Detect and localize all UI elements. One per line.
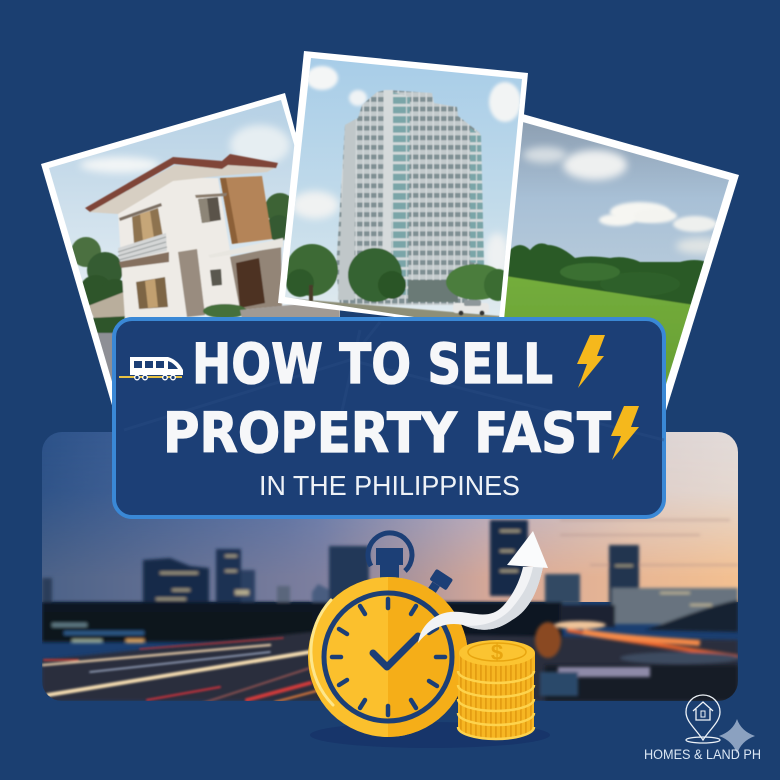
photo: high-rise tower xyxy=(278,50,530,335)
coin stack xyxy=(458,640,535,740)
road xyxy=(42,632,738,701)
heading line 1: HOW TO SELL xyxy=(192,332,553,396)
icon: lightning bolt 1 xyxy=(577,335,605,388)
panel: blurred city skyline photo xyxy=(42,432,740,704)
logo: Homes &amp; Land PH xyxy=(644,695,761,762)
heading line 2: PROPERTY FAST xyxy=(163,401,611,465)
stopwatch xyxy=(308,533,468,737)
photo: house xyxy=(41,93,340,405)
car xyxy=(453,300,489,316)
star sparkle xyxy=(719,719,755,754)
ground shadow xyxy=(310,722,550,748)
icon: lightning bolt 2 xyxy=(611,406,639,460)
icon: train xyxy=(119,357,183,380)
brand name: HOMES & LAND PH xyxy=(644,747,761,762)
arrow xyxy=(418,531,548,643)
subtitle: IN THE PHILIPPINES xyxy=(259,470,520,501)
title panel xyxy=(114,319,664,517)
icon: stopwatch, arrow and coins xyxy=(308,531,550,748)
photo: green field xyxy=(504,114,739,410)
dollar sign: $ xyxy=(491,640,503,665)
